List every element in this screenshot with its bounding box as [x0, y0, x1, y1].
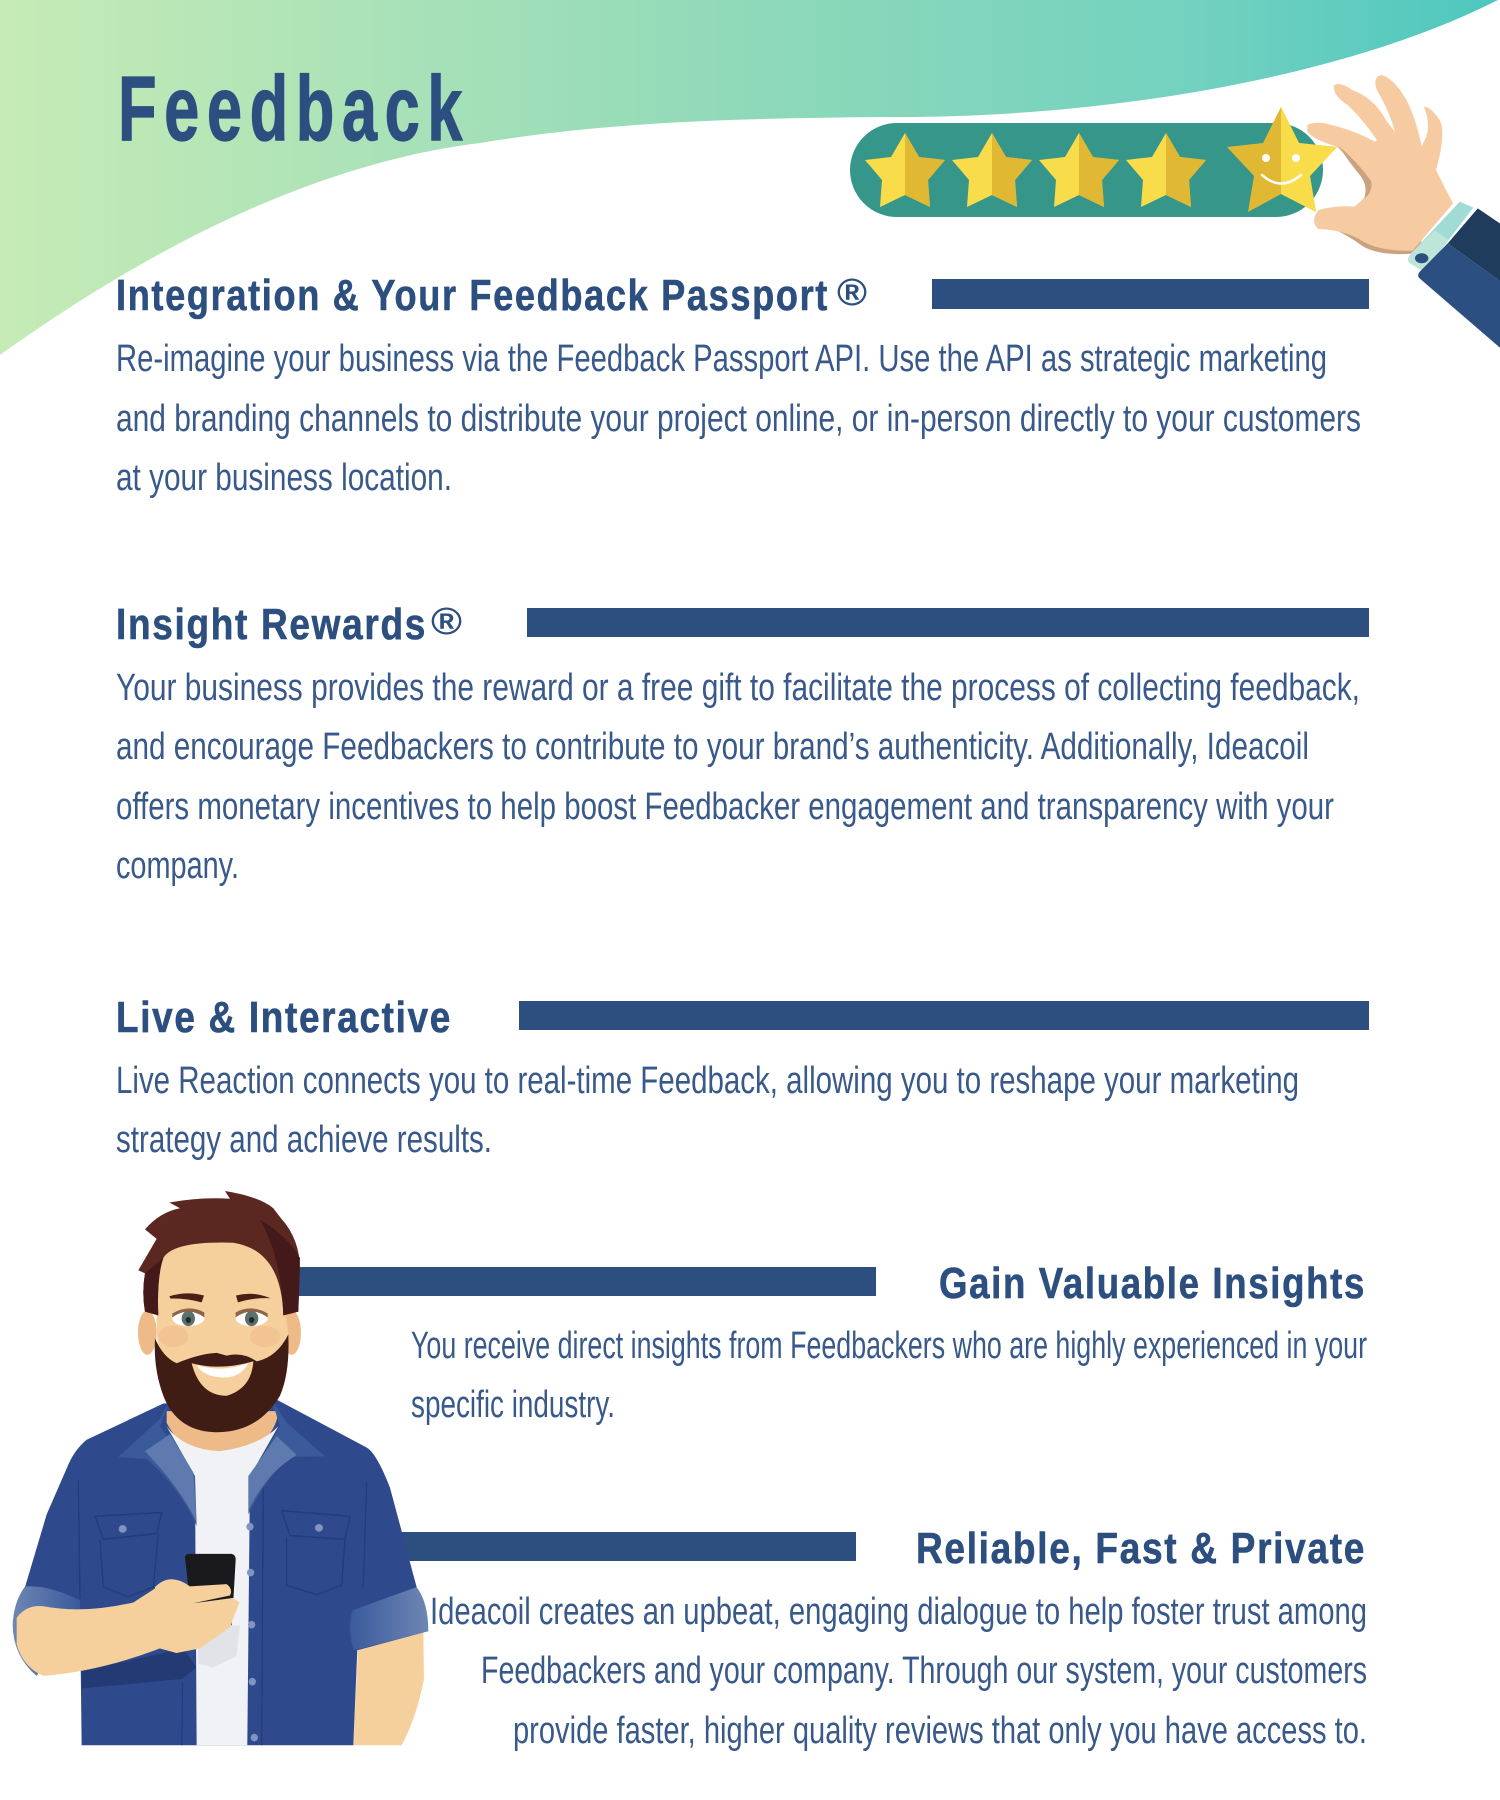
- heading: Gain Valuable Insights: [939, 1259, 1366, 1308]
- mouth and chin: [192, 1361, 253, 1396]
- body text: [430, 1591, 1367, 1752]
- heading bar: [527, 608, 1369, 637]
- face: [157, 1235, 288, 1407]
- hair: [138, 1191, 300, 1315]
- title: Feedback: [118, 58, 470, 160]
- heading bar: [295, 1267, 876, 1296]
- body text: [116, 1060, 1299, 1161]
- smiling star: [1227, 107, 1337, 212]
- heading bar: [400, 1532, 856, 1561]
- t-shirt: [167, 1426, 278, 1745]
- phone: [185, 1554, 236, 1625]
- heading: Integration & Your Feedback Passport: [116, 271, 829, 320]
- beard: [155, 1335, 289, 1432]
- heading: Live & Interactive: [116, 993, 452, 1042]
- eyebrows: [169, 1293, 271, 1302]
- right forearm: [353, 1629, 424, 1745]
- left arm: [17, 1585, 177, 1676]
- heading bar: [932, 279, 1369, 309]
- section: insight rewards: [116, 600, 1369, 887]
- body text: strategy and achieve results.: [116, 1119, 492, 1161]
- shirt shadow under arm: [82, 1648, 197, 1689]
- t-shirt shadow: [198, 1625, 240, 1668]
- shirt: [25, 1400, 428, 1745]
- rating pill: [850, 123, 1323, 217]
- section: reliable fast and private: [400, 1524, 1367, 1752]
- eyes: [172, 1308, 268, 1326]
- registered mark: ®: [431, 601, 462, 643]
- dark side hair: [143, 1220, 300, 1315]
- section: gain valuable insights: [295, 1259, 1367, 1426]
- body text: specific industry.: [411, 1384, 615, 1426]
- section: live and interactive: [116, 993, 1369, 1161]
- body text: company.: [116, 845, 239, 887]
- body text: [116, 338, 1361, 499]
- body text: at your business location.: [116, 457, 452, 499]
- heading bar: [519, 1001, 1369, 1030]
- registered mark: ®: [837, 272, 867, 314]
- body text: [411, 1325, 1367, 1426]
- heading: Insight Rewards: [116, 600, 427, 649]
- shirt buttons: [119, 1523, 323, 1741]
- collar: [118, 1400, 325, 1526]
- hand holding star: [1307, 75, 1500, 348]
- rating illustration: [850, 75, 1500, 348]
- body text: [116, 667, 1360, 887]
- header gradient wave: [0, 0, 1498, 355]
- neck: [167, 1411, 278, 1452]
- four stars: [865, 133, 1206, 207]
- left cuff: [13, 1586, 80, 1676]
- illustration: bearded man with phone: [13, 1191, 428, 1745]
- placket and pockets: [78, 1480, 367, 1745]
- section: integration and feedback passport: [116, 271, 1369, 499]
- heading: Reliable, Fast & Private: [916, 1524, 1366, 1573]
- right cuff: [350, 1587, 428, 1650]
- ears: [138, 1310, 301, 1355]
- hand: [155, 1579, 239, 1653]
- cheek blush: [158, 1326, 280, 1347]
